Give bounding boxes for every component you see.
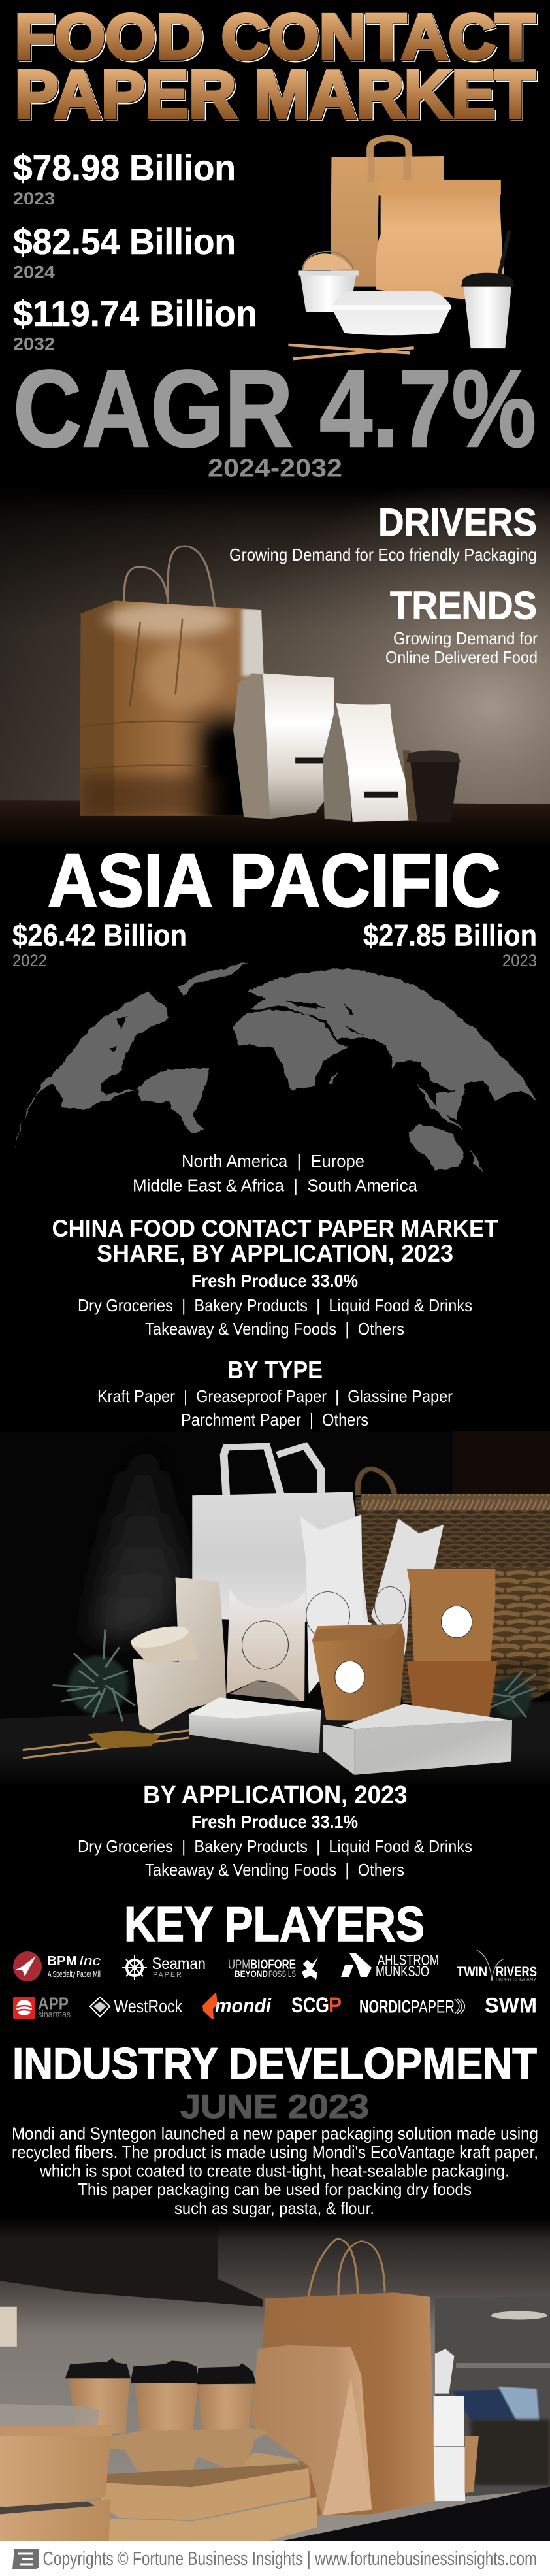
- market value 2023: 2023: [13, 189, 55, 208]
- application list: Dry Groceries | Bakery Products | Liquid Food & Drinks: [78, 1836, 472, 1856]
- illustration: paper bags and takeaway containers: [288, 138, 514, 359]
- logo: UPM Biofore: BIOFORE: [250, 1957, 296, 1972]
- market value 2032: 2032: [13, 334, 55, 354]
- logo: Ahlstrom Munksjo: AHLSTROM: [378, 1952, 439, 1968]
- development date: JUNE 2023: [180, 2088, 369, 2126]
- CAGR period: 2024-2032: [208, 455, 342, 482]
- China application list: [78, 1296, 472, 1339]
- logo: BPM Inc: Inc: [79, 1954, 101, 1968]
- heading: by application: BY APPLICATION, 2023: [143, 1782, 408, 1809]
- Asia Pacific value 2023: 2023: [502, 952, 537, 970]
- title: FOOD CONTACT: [16, 1, 536, 73]
- logo: BPM Inc: BPM: [47, 1954, 77, 1968]
- region list: Middle East & Africa | South America: [133, 1176, 418, 1196]
- logo: UPM Biofore: FOSSILS: [268, 1968, 296, 1979]
- heading: China market share: [52, 1215, 498, 1267]
- logo: BPM Inc: A Specialty Paper Mill: [48, 1969, 101, 1979]
- Asia Pacific value 2022: [12, 919, 187, 970]
- logo: UPM Biofore: BEYOND: [235, 1968, 268, 1979]
- type list: Kraft Paper | Greaseproof Paper | Glassine Paper: [97, 1386, 453, 1406]
- footer bar: [0, 2541, 550, 2576]
- logo: Twin Rivers: PAPER COMPANY: [496, 1977, 537, 1983]
- heading: China market share: CHINA FOOD CONTACT PAPER MARKET: [52, 1215, 498, 1242]
- market value 2024: $82.54 Billion: [13, 221, 236, 262]
- trends text: Online Delivered Food: [385, 647, 538, 667]
- logo: Seaman Paper: PAPER: [153, 1971, 182, 1979]
- logo: mondi: [202, 1992, 272, 2019]
- market value 2032: $119.74 Billion: [13, 293, 257, 334]
- development description: This paper packaging can be used for packing dry foods: [78, 2179, 472, 2199]
- logo: SCGP: P: [329, 1993, 342, 2017]
- world map globe: [13, 963, 538, 1173]
- market value 2024: 2024: [13, 263, 55, 282]
- heading: Asia Pacific: ASIA PACIFIC: [48, 839, 500, 922]
- logo: SCGP: SCG: [291, 1993, 329, 2017]
- logo: Seaman Paper: [122, 1955, 206, 1980]
- photo: kraft bag, pouches and cup: [0, 488, 550, 845]
- China application list: Dry Groceries | Bakery Products | Liquid Food & Drinks: [78, 1296, 472, 1315]
- title: FOOD CONTACT: [14, 1, 535, 72]
- logo: mondi: mondi: [215, 1995, 272, 2017]
- photo: white and kraft food packaging: [0, 1431, 550, 1789]
- logo: Twin Rivers: RIVERS: [496, 1965, 537, 1980]
- title: [14, 1, 537, 133]
- title: PAPER MARKET: [14, 56, 536, 132]
- logo: UPM Biofore: UPM: [228, 1957, 250, 1972]
- trends text: [385, 628, 538, 667]
- logo: APP Sinarmas: APP: [38, 1994, 69, 2014]
- logo: Nordic Paper: [359, 1997, 465, 2016]
- trends text: Growing Demand for: [393, 628, 538, 648]
- logo: Seaman Paper: Seaman: [152, 1955, 206, 1973]
- logo: Ahlstrom Munksjo: [341, 1952, 439, 1980]
- logo: APP Sinarmas: sinarmas: [38, 2009, 71, 2020]
- market value 2024: [13, 221, 236, 282]
- region list: [133, 1151, 418, 1196]
- region list: North America | Europe: [182, 1151, 364, 1171]
- application list: [78, 1836, 472, 1880]
- application list: Takeaway & Vending Foods | Others: [145, 1860, 404, 1880]
- logo: Nordic Paper: PAPER: [411, 1997, 455, 2016]
- title: PAPER MARKET: [16, 58, 537, 133]
- title: FOOD CONTACT: [16, 3, 537, 74]
- heading: by type: BY TYPE: [227, 1356, 323, 1384]
- photo: takeaway cups, bags and pizza boxes on counter: [0, 2217, 550, 2541]
- market value 2023: $78.98 Billion: [13, 147, 236, 188]
- heading: drivers: DRIVERS: [378, 500, 537, 544]
- Asia Pacific value 2022: $26.42 Billion: [12, 919, 187, 953]
- Asia Pacific value 2023: $27.85 Billion: [363, 919, 537, 953]
- footer logo: [12, 2549, 39, 2569]
- Asia Pacific value 2022: 2022: [12, 952, 47, 970]
- logo: APP Sinarmas: [13, 1994, 71, 2020]
- logo: SWM: SWM: [485, 1994, 537, 2017]
- logo: Nordic Paper: NORDIC: [359, 1997, 411, 2016]
- development description: [12, 2123, 538, 2218]
- logo: BPM Inc: [13, 1951, 101, 1981]
- logo: Twin Rivers: [457, 1950, 537, 1983]
- logo: Twin Rivers: TWIN: [457, 1965, 487, 1980]
- market value 2032: [13, 293, 257, 354]
- type list: Parchment Paper | Others: [181, 1410, 368, 1429]
- Asia Pacific value 2023: [363, 919, 537, 970]
- China application list: Takeaway & Vending Foods | Others: [145, 1319, 404, 1339]
- title: PAPER MARKET: [16, 57, 536, 132]
- type list: [97, 1386, 453, 1429]
- logo: WestRock: [90, 1997, 182, 2017]
- logo: Ahlstrom Munksjo: MUNKSJÖ: [376, 1963, 429, 1980]
- logo: WestRock: WestRock: [114, 1997, 182, 2016]
- pine branch left: [53, 1630, 135, 1721]
- development description: which is spot coated to create dust-tight, heat-sealable packaging.: [39, 2161, 510, 2181]
- market value 2023: [13, 147, 236, 208]
- heading: China market share: SHARE, BY APPLICATION, 2023: [97, 1240, 453, 1267]
- China fresh produce share: Fresh Produce 33.0%: [191, 1271, 358, 1291]
- logo: UPM Biofore: [228, 1957, 318, 1980]
- development description: such as sugar, pasta, & flour.: [174, 2198, 374, 2218]
- pine branch right: [491, 1671, 537, 1718]
- heading: trends: TRENDS: [390, 584, 537, 627]
- fresh produce share: Fresh Produce 33.1%: [191, 1812, 358, 1832]
- heading: key players: KEY PLAYERS: [124, 1897, 425, 1951]
